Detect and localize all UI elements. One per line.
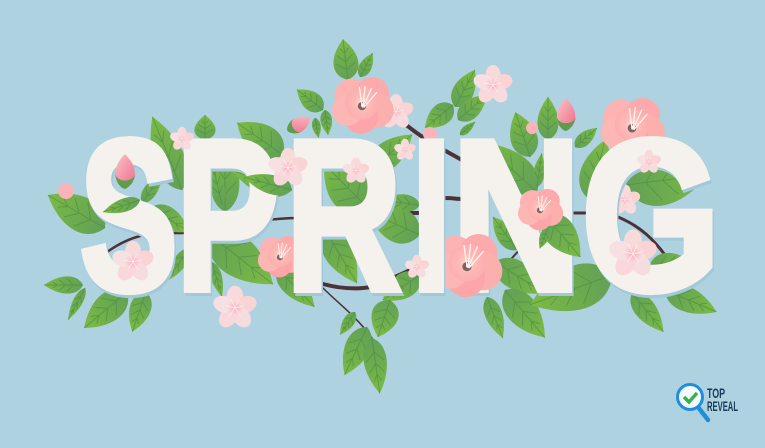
- letter shadow: N: [452, 98, 583, 340]
- title: SPRING: P: [176, 94, 280, 336]
- logo: Top Reveal: REVEAL: [707, 399, 738, 414]
- icon: magnifier with check: [678, 384, 708, 420]
- branches: [95, 113, 670, 338]
- letter shadow: I: [413, 98, 453, 340]
- logo: Top Reveal: [678, 384, 738, 420]
- title: SPRING: N: [451, 95, 582, 337]
- title: SPRING: S: [79, 95, 178, 337]
- letter shadow: G: [582, 99, 723, 340]
- title: SPRING: R: [285, 95, 402, 336]
- letter shadow: S: [81, 98, 180, 340]
- leaves behind letters: [39, 38, 721, 395]
- letter shadow: [81, 97, 723, 340]
- title: SPRING: [79, 94, 721, 337]
- title: SPRING: G: [581, 96, 721, 337]
- flowers behind letters: [58, 65, 665, 331]
- spring floral illustration: [44, 39, 738, 422]
- letter shadow: R: [287, 98, 404, 339]
- logo text: TOP: [707, 386, 725, 401]
- title: SPRING: I: [411, 95, 452, 337]
- letter shadow: P: [177, 97, 281, 339]
- foliage and flowers in front of letters: [101, 127, 662, 297]
